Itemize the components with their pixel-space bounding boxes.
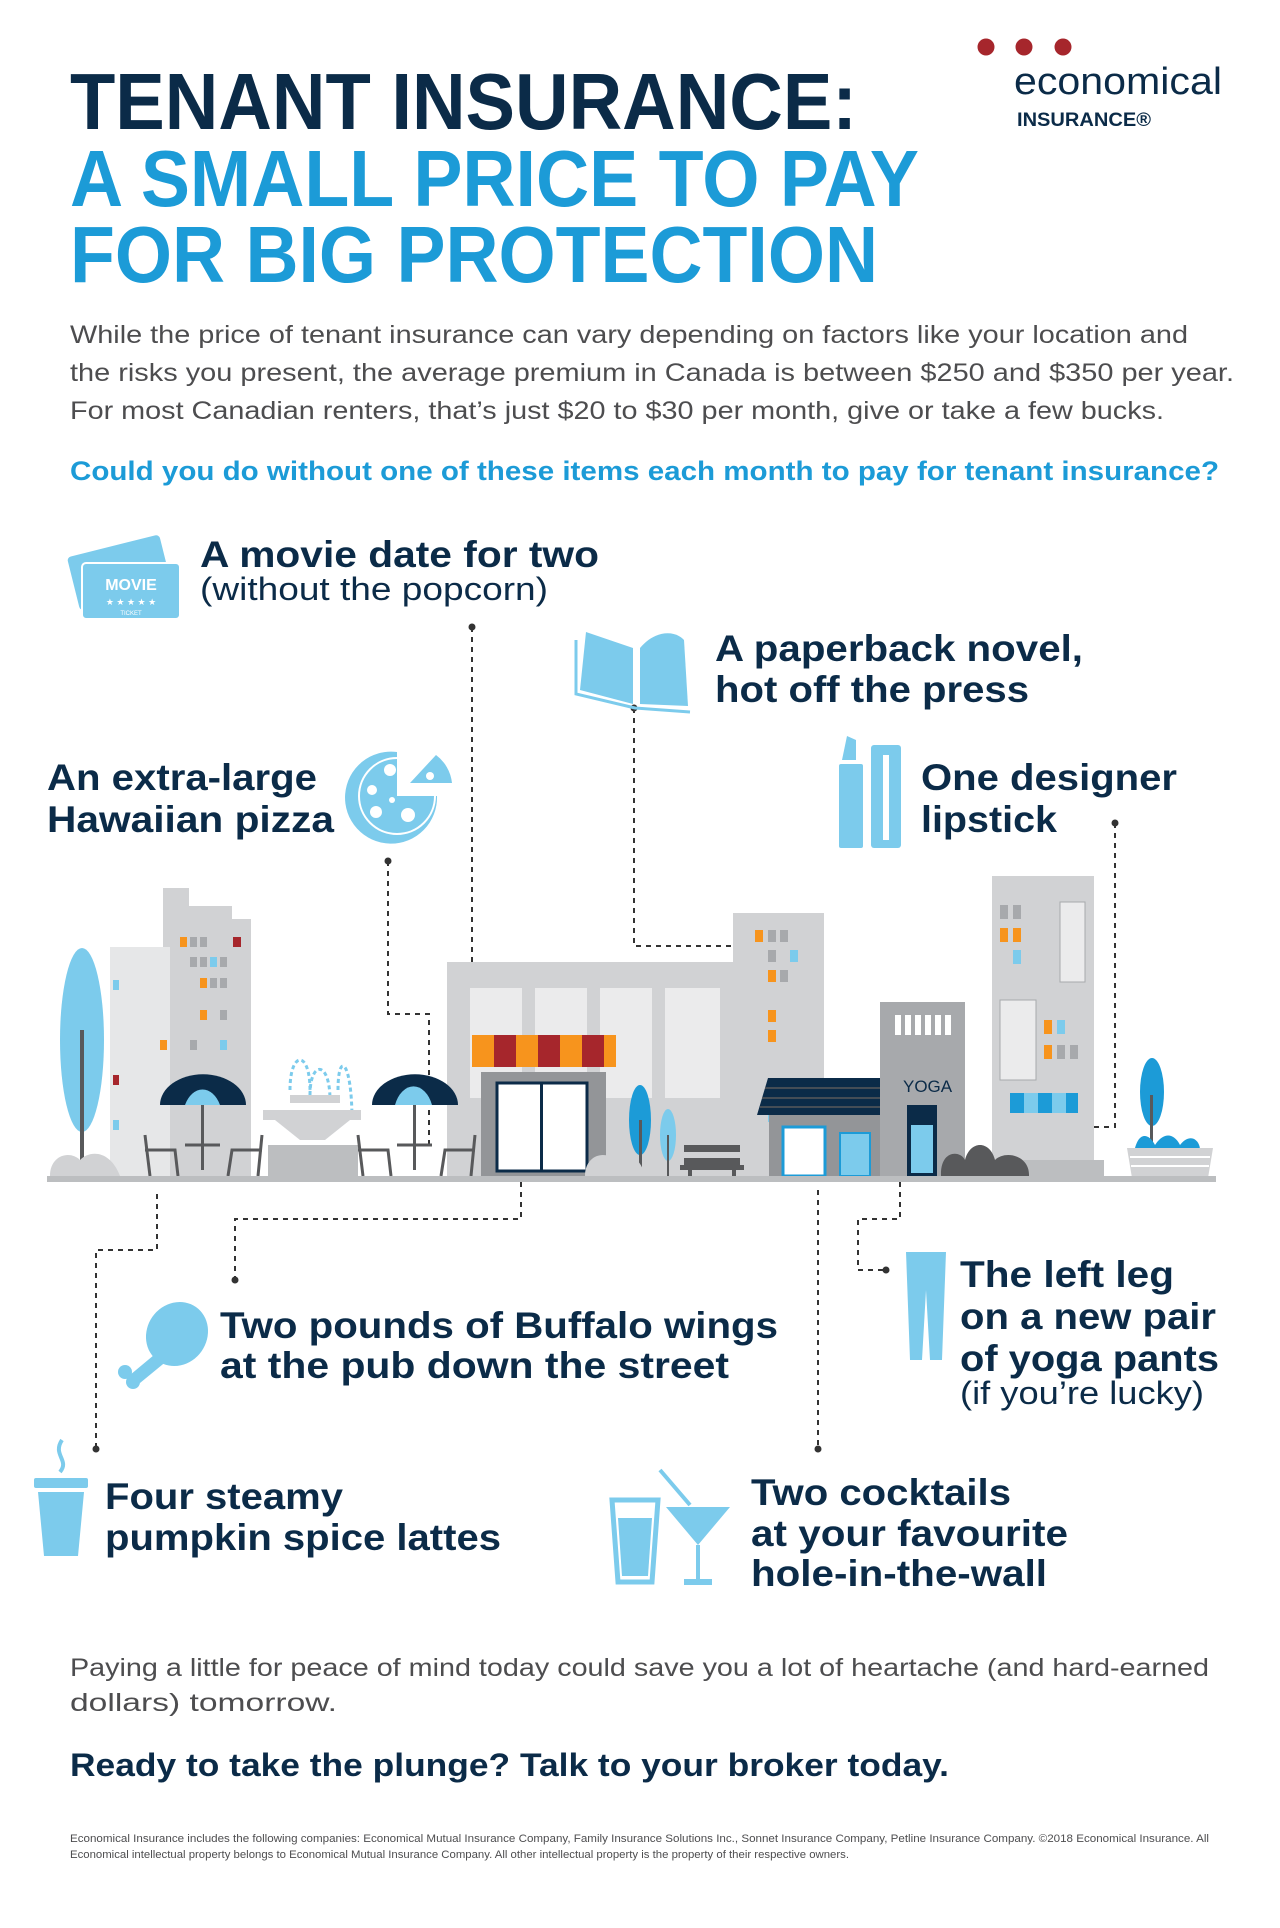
item: movie — [67, 534, 599, 619]
icon: movie tickets: TICKET — [120, 611, 142, 617]
item: cocktails — [612, 1470, 1068, 1594]
item: pizza: Hawaiian pizza — [47, 799, 334, 840]
icon: movie tickets: MOVIE — [105, 577, 157, 594]
icon: yoga pants — [906, 1252, 946, 1360]
item: yoga pants — [906, 1252, 1219, 1411]
item: book: hot off the press — [715, 669, 1029, 710]
question: Could you do without one of these items each month to pay for tenant insurance? — [70, 456, 1219, 486]
icon: movie tickets: ★ ★ ★ ★ ★ — [106, 597, 156, 607]
building: middle large — [447, 962, 747, 1176]
intro paragraph — [70, 321, 1234, 425]
small blue trees — [629, 1085, 651, 1155]
item: lipstick: lipstick — [921, 799, 1057, 840]
fountain — [263, 1060, 361, 1176]
bushes — [941, 1145, 1029, 1176]
title — [70, 57, 919, 299]
intro paragraph: For most Canadian renters, that’s just $20 to $30 per month, give or take a few bucks. — [70, 397, 1164, 425]
logo: INSURANCE® — [1017, 110, 1151, 131]
title: TENANT INSURANCE: — [70, 57, 857, 146]
item: wings: at the pub down the street — [220, 1345, 729, 1386]
item: lattes — [34, 1440, 501, 1558]
item: lipstick: One designer — [921, 757, 1177, 798]
title: FOR BIG PROTECTION — [70, 210, 878, 299]
item: movie: A movie date for two — [200, 534, 599, 575]
item: book — [576, 628, 1083, 712]
umbrellas and tables — [145, 1074, 475, 1176]
item: cocktails: hole-in-the-wall — [751, 1553, 1047, 1594]
item: lattes: pumpkin spice lattes — [105, 1517, 501, 1558]
icon: pizza — [345, 752, 452, 844]
item: wings — [118, 1290, 778, 1389]
intro paragraph: the risks you present, the average premium in Canada is between $250 and $350 per year. — [70, 359, 1234, 387]
item: yoga pants: The left leg — [960, 1254, 1174, 1295]
icon: latte cup — [34, 1440, 88, 1556]
ground — [47, 1176, 1216, 1182]
logo — [978, 38, 1222, 131]
icon: movie tickets — [67, 534, 180, 619]
building: tall behind — [733, 913, 824, 1176]
bench — [680, 1145, 744, 1176]
right tall building — [992, 876, 1104, 1176]
item: pizza: An extra-large — [47, 757, 317, 798]
building: left tall — [163, 888, 251, 1176]
shop navy roof — [757, 1078, 904, 1176]
call to action: Ready to take the plunge? Talk to your broker today. — [70, 1747, 949, 1783]
item: lattes: Four steamy — [105, 1476, 343, 1517]
title: A SMALL PRICE TO PAY — [70, 134, 919, 223]
city scene — [47, 876, 1216, 1182]
closing paragraph: dollars) tomorrow. — [70, 1689, 337, 1717]
icon: glasses — [612, 1470, 730, 1585]
footer: Economical intellectual property belongs to Economical Mutual Insurance Company. All other intellectual property is the property of their respective owners. — [70, 1849, 849, 1861]
yoga building: YOGA — [903, 1077, 953, 1096]
tree left — [60, 948, 104, 1132]
item: wings: Two pounds of Buffalo wings — [220, 1305, 778, 1346]
closing paragraph — [70, 1654, 1209, 1717]
item: pizza — [47, 752, 452, 844]
item: cocktails: at your favourite — [751, 1513, 1068, 1554]
footer — [70, 1833, 1209, 1861]
icon: book — [576, 632, 690, 712]
item: movie: (without the popcorn) — [200, 571, 548, 607]
item: yoga pants: of yoga pants — [960, 1338, 1219, 1379]
planter tree — [1127, 1058, 1213, 1178]
item: lipstick — [839, 736, 1177, 848]
closing paragraph: Paying a little for peace of mind today could save you a lot of heartache (and hard-earned — [70, 1654, 1209, 1682]
footer: Economical Insurance includes the following companies: Economical Mutual Insurance Company, Family Insurance Solutions Inc., Sonnet Insurance Company, Petline Insurance Company. ©2018 Economical Insurance. All — [70, 1833, 1209, 1845]
icon: lipstick — [839, 736, 901, 848]
item: book: A paperback novel, — [715, 628, 1083, 669]
storefront awning shop — [472, 1035, 616, 1176]
icon: drumstick — [118, 1290, 221, 1389]
connector lines — [96, 627, 1115, 1449]
item: yoga pants: on a new pair — [960, 1296, 1216, 1337]
logo: economical — [1014, 61, 1222, 103]
item: yoga pants: (if you’re lucky) — [960, 1375, 1204, 1411]
intro paragraph: While the price of tenant insurance can vary depending on factors like your location and — [70, 321, 1188, 349]
yoga building — [880, 1002, 965, 1176]
item: cocktails: Two cocktails — [751, 1472, 1011, 1513]
